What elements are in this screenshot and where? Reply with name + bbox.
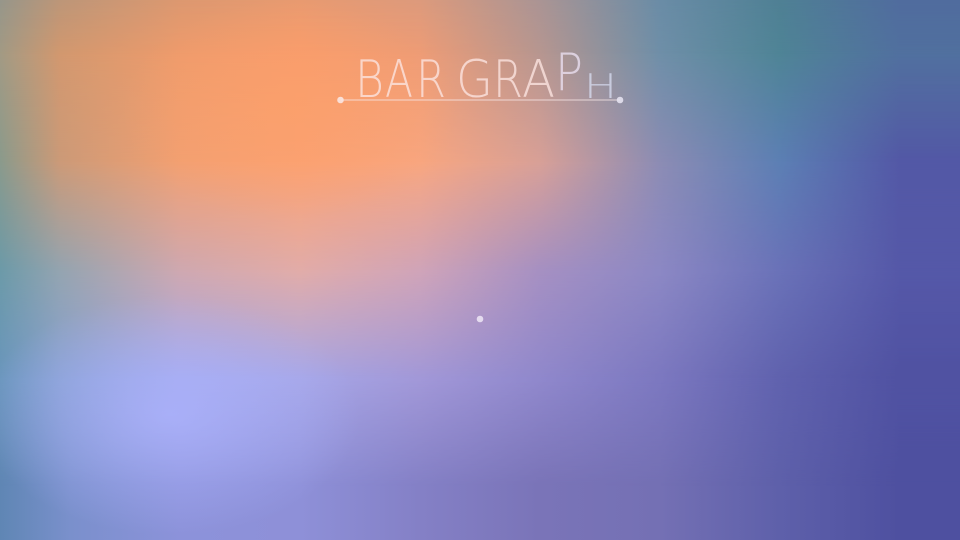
- title text: R: [493, 50, 523, 110]
- center dot: [477, 316, 483, 322]
- title text: A: [385, 50, 413, 110]
- title text: A: [522, 50, 555, 110]
- title text: G: [456, 50, 493, 110]
- title text: R: [416, 50, 446, 110]
- title text: [355, 43, 617, 110]
- title text: H: [584, 67, 617, 107]
- underline with end dots: [337, 97, 623, 103]
- title text: P: [555, 43, 583, 103]
- title text: B: [355, 50, 384, 110]
